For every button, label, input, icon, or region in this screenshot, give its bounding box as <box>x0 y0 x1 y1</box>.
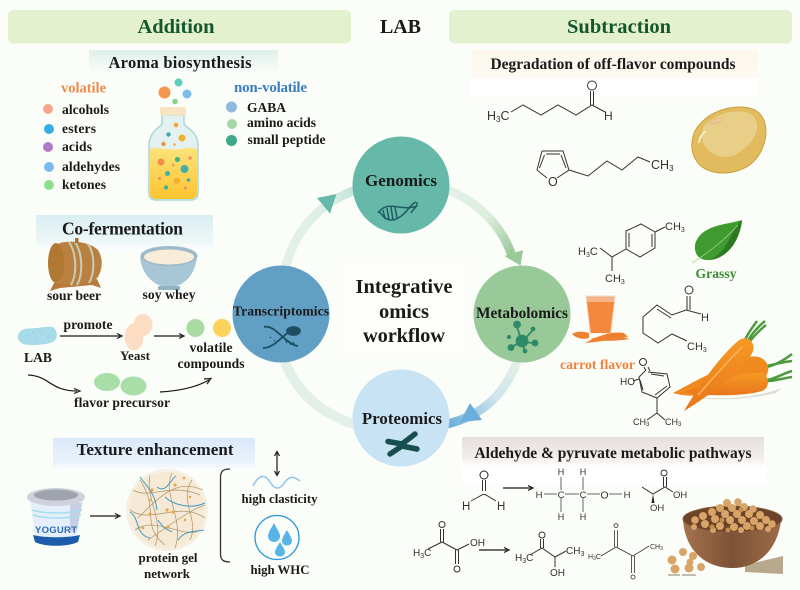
molecule: trans-2-decenal: H <box>701 312 709 324</box>
bracket <box>220 469 230 562</box>
molecule: diacetyl: H <box>588 554 593 561</box>
icon: LAB bacterium <box>18 327 56 345</box>
molecule: acetoin: 3 <box>580 551 584 558</box>
icon: elasticity <box>253 452 300 488</box>
molecule: acetoin: CH <box>566 546 580 557</box>
icon: volatile compound dots <box>186 319 231 337</box>
arrow: promote <box>60 334 122 338</box>
icon: yogurt cup <box>27 488 85 546</box>
molecule: diacetyl <box>588 524 663 579</box>
icon: flask with bubbles <box>149 78 198 200</box>
icon: soybean <box>692 107 766 173</box>
arrow: metabolomics to proteomics <box>447 362 517 424</box>
molecule: hinokitiol: 3 <box>646 422 650 428</box>
molecule: formaldehyde: H <box>497 501 505 513</box>
molecule: hexanal: 3 <box>496 115 501 124</box>
center panel: integrative omics workflow: omics <box>379 301 429 323</box>
panel: Aroma biosynthesis <box>43 50 326 200</box>
arrow: transcriptomics to genomics <box>286 190 356 266</box>
heading: Texture enhancement <box>53 438 255 472</box>
icon: water drops <box>255 516 299 560</box>
label: Yeast: Yeast <box>120 348 151 363</box>
label: protein gel network <box>138 550 198 581</box>
volatile list <box>43 80 120 192</box>
molecule: terpinene: 3 <box>586 252 590 259</box>
flow diagram <box>18 314 244 410</box>
molecule: diacetyl: CH <box>650 544 660 551</box>
molecule: diacetyl: 3 <box>593 556 596 562</box>
molecule: hinokitiol <box>620 358 682 428</box>
molecule: ethanol: C <box>558 490 565 501</box>
volatile list: acids <box>62 139 92 154</box>
icon: DNA <box>378 202 417 220</box>
volatile list: volatile <box>61 80 107 96</box>
icon: protein gel network <box>126 469 208 551</box>
header: LAB: LAB <box>380 16 421 38</box>
header: Subtraction <box>449 10 792 44</box>
heading: degradation: Degradation of off-flavor compounds <box>490 56 736 73</box>
white backdrop <box>462 465 766 485</box>
molecule: hinokitiol: CH <box>665 417 678 427</box>
label: sour beer: sour beer <box>47 288 101 303</box>
heading: Co-fermentation <box>36 215 213 252</box>
circle: Proteomics <box>352 370 450 466</box>
icon: bowl of chickpeas <box>668 498 783 575</box>
icon: chromosome <box>388 434 417 454</box>
molecule: trans-2-decenal: 3 <box>703 347 707 354</box>
molecule: pyruvic acid <box>413 522 485 572</box>
heading: pathways: Aldehyde & pyruvate metabolic pathways <box>474 445 752 462</box>
circle: Genomics <box>352 136 450 234</box>
icon: carrots <box>673 321 792 411</box>
circle: Metabolomics: Metabolomics <box>476 305 568 322</box>
header: Subtraction: Subtraction <box>567 16 672 38</box>
circle: Metabolomics <box>474 266 570 362</box>
circle: Genomics: Genomics <box>365 171 437 190</box>
molecule: terpinene: CH <box>605 273 621 285</box>
molecule: trans-2-decenal: CH <box>687 341 703 353</box>
icon: cell <box>508 322 538 352</box>
molecule: formaldehyde: H <box>462 501 470 513</box>
label: high WHC: high WHC <box>250 563 310 577</box>
arrow: formaldehyde to ethanol <box>503 486 533 490</box>
label: carrot flavor: carrot flavor <box>560 357 635 372</box>
icon: leaf <box>692 220 742 263</box>
heading: Texture enhancement: Texture enhancement <box>76 440 234 459</box>
molecule: acetoin: OH <box>550 568 565 579</box>
molecule: lactic acid: OH <box>650 503 664 514</box>
molecule: ethanol: C <box>580 490 587 501</box>
heading: Co-fermentation: Co-fermentation <box>62 218 183 238</box>
molecule: pyruvic acid: 3 <box>420 553 424 560</box>
volatile list: esters <box>62 121 96 136</box>
circle: Proteomics: Proteomics <box>362 409 442 428</box>
molecule: terpinene: CH <box>665 221 681 233</box>
molecule: terpinene: C <box>590 246 598 258</box>
molecule: lactic acid <box>642 470 687 514</box>
molecule: hinokitiol: 3 <box>678 422 682 428</box>
center panel: integrative omics workflow: Integrative <box>356 276 452 298</box>
center panel: integrative omics workflow <box>342 258 467 357</box>
molecule: hexanal: H <box>604 109 613 123</box>
icon: soy whey bowl <box>140 246 198 290</box>
volatile list: aldehydes <box>62 159 120 174</box>
molecule: terpinene: 3 <box>621 279 625 286</box>
panel: Aldehyde & pyruvate metabolic pathways <box>413 437 783 579</box>
molecule: formaldehyde <box>462 471 505 513</box>
molecule: hexanal: H <box>487 109 496 123</box>
circle: Transcriptomics <box>232 266 330 362</box>
molecule: ethanol: H <box>580 512 586 522</box>
molecule: 2-pentylfuran: O <box>548 175 558 189</box>
volatile list: alcohols <box>62 102 109 117</box>
non-volatile list: non-volatile <box>234 80 307 96</box>
arrow: LAB to flavor precursor <box>28 375 80 394</box>
label: protein gel network: protein gel <box>138 550 198 565</box>
circle: Transcriptomics: Transcriptomics <box>233 304 329 318</box>
molecule: terpinene <box>578 221 685 286</box>
icon: yogurt cup: YOGURT <box>35 525 77 536</box>
molecule: ethanol: O <box>600 490 609 502</box>
label: volatile compounds: compounds <box>178 356 244 371</box>
molecule: pyruvic acid: OH <box>470 538 485 549</box>
non-volatile list <box>226 80 326 147</box>
icon: flavor precursor ovals <box>94 373 146 396</box>
molecule: pyruvic acid: H <box>413 548 420 559</box>
icon: barrel <box>48 238 102 291</box>
molecule: hexanal: C <box>500 109 510 123</box>
molecule: ethanol: H <box>536 490 543 501</box>
molecule: acetoin: C <box>526 553 533 564</box>
heading: Aroma biosynthesis <box>89 50 278 75</box>
label: LAB: LAB <box>24 350 52 365</box>
non-volatile list: GABA <box>247 100 286 115</box>
molecule: hinokitiol: CH <box>633 417 646 427</box>
label: volatile compounds: volatile <box>190 340 232 355</box>
arrow: proteomics to transcriptomics <box>285 362 356 425</box>
arrow: to volatile <box>154 334 184 338</box>
label: volatile compounds <box>178 340 244 371</box>
heading: degradation <box>472 50 758 78</box>
molecule: terpinene: H <box>578 246 586 258</box>
non-volatile list: amino acids <box>247 115 316 130</box>
label: Grassy: Grassy <box>696 266 737 281</box>
omics workflow <box>232 136 570 466</box>
panel: Texture enhancement <box>27 438 318 581</box>
header: Addition <box>8 10 351 44</box>
molecule: diacetyl: C <box>596 554 601 561</box>
molecule: ethanol <box>536 467 631 522</box>
arrow: genomics to metabolomics <box>448 190 523 266</box>
arrow: pyruvate to acetoin <box>479 548 509 552</box>
molecule: hexanal <box>487 81 613 124</box>
icon: transcription <box>263 327 300 348</box>
heading: pathways <box>462 437 764 467</box>
label: promote: promote <box>64 317 112 332</box>
molecule: 2-pentylfuran <box>537 151 674 189</box>
molecule: 2-pentylfuran: 3 <box>669 164 674 173</box>
label: protein gel network: network <box>144 566 191 581</box>
molecule: pyruvic acid: C <box>424 548 431 559</box>
molecule: terpinene: 3 <box>681 227 685 234</box>
arrow: yogurt to gel <box>90 514 120 518</box>
panel: Degradation of off-flavor compounds <box>470 50 792 428</box>
molecule: diacetyl: 3 <box>660 546 663 552</box>
arrow: precursor to volatile <box>160 378 211 392</box>
molecule: hinokitiol: HO <box>620 377 635 388</box>
header: Addition: Addition <box>138 16 215 38</box>
icon: carrot juice <box>572 296 630 343</box>
center panel: integrative omics workflow: workflow <box>363 325 445 347</box>
label: flavor precursor: flavor precursor <box>74 395 170 410</box>
volatile list: ketones <box>62 177 106 192</box>
molecule: acetoin <box>515 532 584 579</box>
panel: Co-fermentation <box>18 215 244 410</box>
molecule: acetoin: 3 <box>522 558 526 565</box>
molecule: trans-2-decenal <box>643 286 709 354</box>
molecule: ethanol: H <box>558 512 564 522</box>
molecule: ethanol: H <box>580 467 586 477</box>
molecule: lactic acid: OH <box>673 490 687 501</box>
molecule: ethanol: H <box>624 490 631 501</box>
icon: yeast <box>124 314 152 350</box>
label: soy whey: soy whey <box>142 287 196 302</box>
molecule: ethanol: H <box>558 467 564 477</box>
label: high elasticity: high clasticity <box>242 492 318 506</box>
heading: Aroma biosynthesis: Aroma biosynthesis <box>108 53 252 72</box>
white backdrop <box>470 78 758 97</box>
non-volatile list: small peptide <box>248 132 326 147</box>
molecule: 2-pentylfuran: CH <box>651 158 669 172</box>
molecule: acetoin: H <box>515 553 522 564</box>
